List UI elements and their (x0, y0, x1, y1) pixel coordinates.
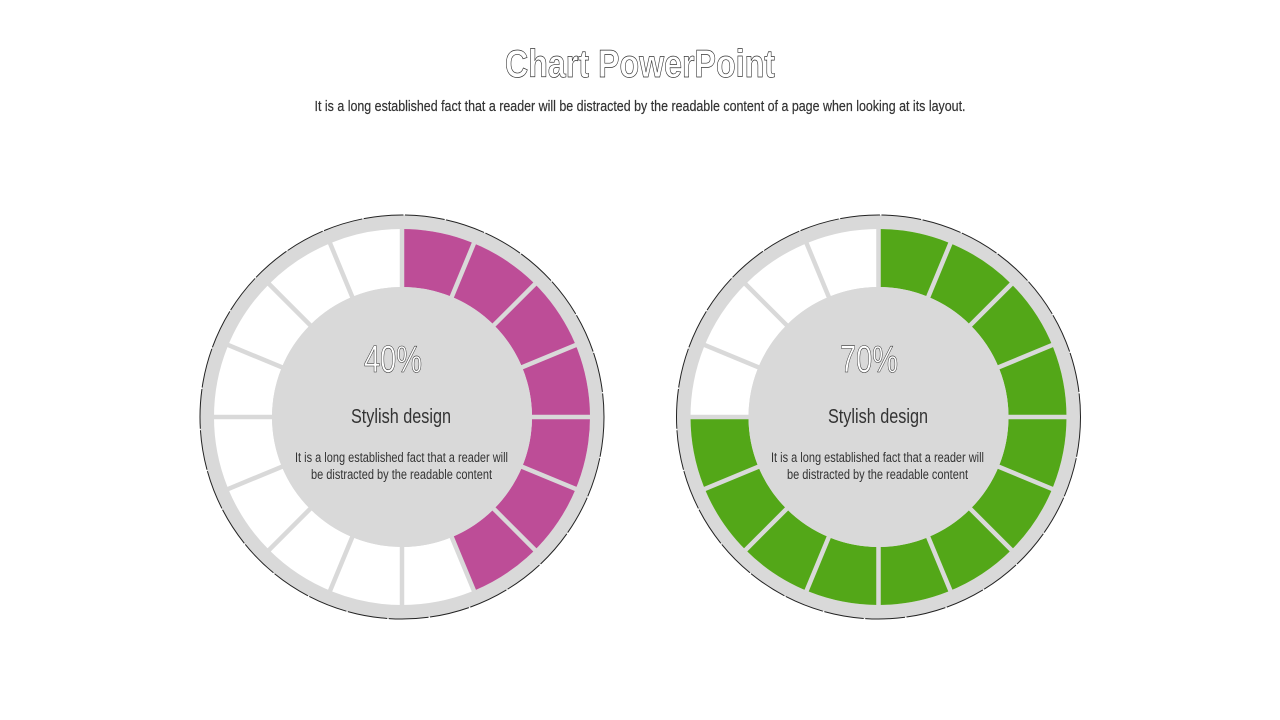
outer disc (676, 215, 1080, 619)
filled segments: purple (402, 258, 561, 564)
filled segments: green (720, 258, 1038, 576)
segment separators (690, 228, 1068, 606)
description (771, 450, 984, 482)
subtitle: It is a long established fact that a reader will be distracted by the readable content of a page when looking at its layout. (314, 98, 966, 115)
label: stylish design: Stylish design (351, 406, 451, 428)
outer disc (200, 215, 604, 619)
description (295, 450, 508, 482)
segment separators (213, 228, 591, 606)
inner disc (272, 287, 532, 547)
empty track (243, 258, 561, 576)
description: It is a long established fact that a reader will (771, 450, 984, 465)
description: be distracted by the readable content (311, 467, 492, 482)
title: Chart PowerPoint (505, 43, 775, 86)
inner disc (748, 287, 1008, 547)
description: It is a long established fact that a reader will (295, 450, 508, 465)
description: be distracted by the readable content (787, 467, 968, 482)
panel: 40% donut chart (200, 215, 604, 619)
percentage: 70%: 70% (840, 339, 898, 381)
label: stylish design: Stylish design (828, 406, 928, 428)
empty track (720, 258, 1038, 576)
percentage: 40%: 40% (364, 339, 422, 381)
panel: 70% donut chart (676, 215, 1080, 619)
